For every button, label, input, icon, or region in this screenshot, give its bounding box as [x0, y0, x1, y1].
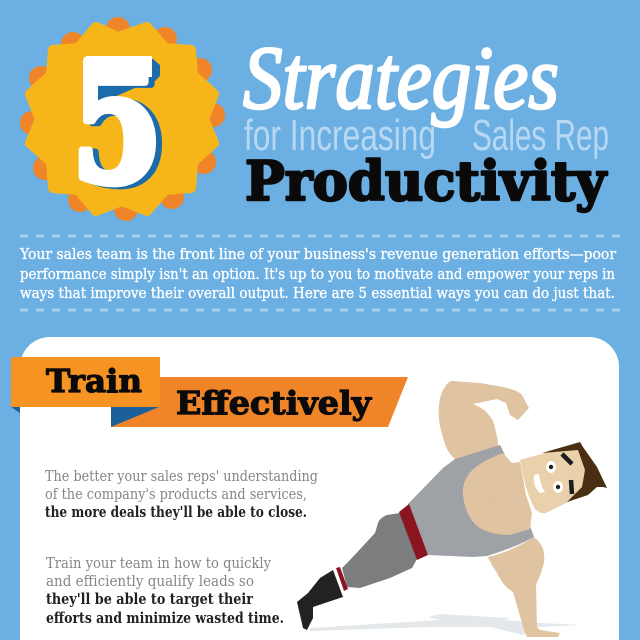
text block: qualifying leads: and efficiently qualify leads so — [46, 574, 254, 590]
belt — [399, 504, 428, 560]
sock — [336, 567, 348, 591]
head — [520, 446, 588, 513]
top dashed divider — [20, 234, 620, 238]
text block: product knowledge: The better your sales reps' understanding — [45, 469, 318, 485]
heading ribbon: Effectively — [111, 377, 408, 427]
panel: train effectively — [11, 337, 619, 640]
eyes — [546, 461, 563, 493]
tank top — [408, 445, 534, 557]
badge: number 5 sunburst — [20, 17, 225, 223]
text block: qualifying leads: Train your team in how to quickly — [46, 556, 272, 572]
mouth — [534, 474, 545, 493]
intro text — [19, 245, 617, 302]
text block: qualifying leads: efforts and minimize wasted time. — [46, 610, 284, 627]
heading ribbon: Train — [11, 357, 160, 413]
illustration: muscular man doing side plank — [297, 381, 607, 637]
numeral 5: 5 — [77, 30, 169, 223]
trousers — [342, 513, 417, 588]
numeral 5: 5 — [71, 28, 163, 221]
raised arm — [439, 381, 529, 459]
heading ribbon: Effectively: Effectively — [176, 384, 372, 422]
subtitle: for Increasing Sales Rep: for Increasing — [244, 111, 436, 160]
title: Strategies: Strategies — [243, 29, 559, 128]
text block: qualifying leads: they'll be able to target their — [46, 591, 253, 608]
eyebrows — [562, 454, 572, 494]
title: Productivity: Productivity — [245, 149, 608, 213]
floor shadow — [310, 614, 582, 635]
text block: product knowledge — [45, 469, 318, 521]
heading ribbon: Train: Train — [46, 362, 142, 400]
text block: qualifying leads — [46, 556, 284, 627]
chest crease — [474, 495, 503, 507]
hair — [542, 442, 607, 502]
chest — [463, 453, 532, 535]
supporting arm — [488, 537, 560, 637]
text block: product knowledge: the more deals they'll be able to close. — [45, 504, 307, 521]
bottom dashed divider — [20, 308, 620, 312]
boot — [297, 570, 343, 630]
text block: product knowledge: of the company's products and services, — [45, 487, 307, 503]
